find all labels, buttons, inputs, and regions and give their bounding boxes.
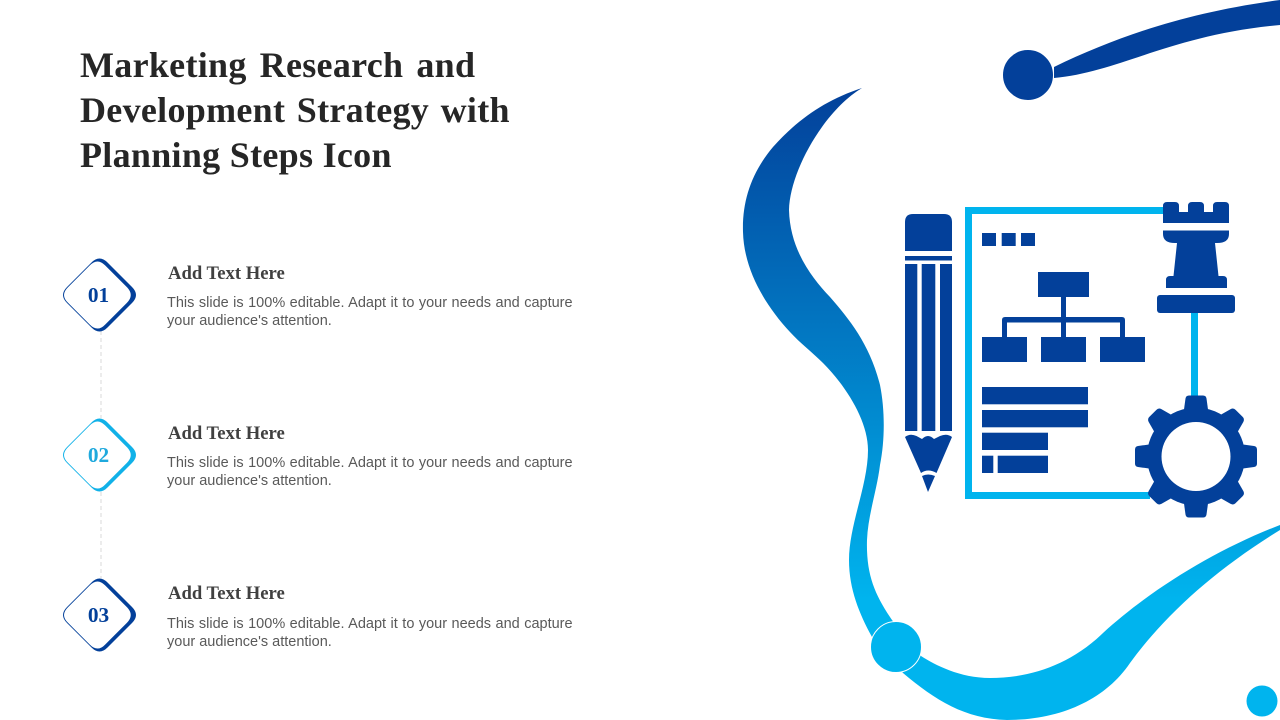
badge 02: 02 (88, 443, 109, 467)
badge 03 (63, 578, 136, 652)
step 1 (63, 258, 573, 332)
step 1 body: This slide is 100% editable. Adapt it to your needs and capture (167, 295, 573, 311)
badge 01: 01 (88, 283, 109, 307)
step 2 body: your audience's attention. (167, 473, 332, 489)
badge 01 (63, 258, 136, 332)
icon: pencil (905, 214, 952, 492)
icon: list bars (982, 387, 1088, 473)
step 2 heading: Add Text Here (168, 423, 285, 444)
icon: three small squares (982, 233, 1035, 246)
icon: document frame (968, 210, 1163, 496)
title: Planning Steps Icon (80, 135, 392, 175)
badge 02 (63, 418, 136, 492)
connector: dashed line 1 (100, 331, 102, 418)
badge 03: 03 (88, 603, 109, 627)
step 1 body (167, 295, 573, 329)
connector: dashed line 2 (100, 492, 102, 578)
step 1 body: your audience's attention. (167, 313, 332, 329)
step 2 (63, 418, 573, 492)
title: Development Strategy with (80, 90, 510, 130)
swoosh: top right curve (1054, 0, 1280, 78)
step 2 body: This slide is 100% editable. Adapt it to your needs and capture (167, 455, 573, 471)
icon: connector rook to gear (1191, 310, 1198, 400)
step 1 heading: Add Text Here (168, 263, 285, 284)
icon: org chart (982, 272, 1145, 362)
swoosh: main gradient curve (743, 88, 1280, 720)
step 3 body (167, 616, 573, 650)
step 3 (63, 578, 573, 652)
icon: gear (1135, 396, 1257, 518)
step 2 body (167, 455, 573, 489)
icon: chess rook (1157, 202, 1235, 313)
title: Marketing Research and (80, 45, 475, 85)
title (80, 45, 510, 175)
dot: bottom right (1246, 686, 1278, 716)
step 3 body: This slide is 100% editable. Adapt it to your needs and capture (167, 616, 573, 632)
step 3 heading: Add Text Here (168, 583, 285, 604)
dot: top dark (1002, 50, 1054, 100)
step 3 body: your audience's attention. (167, 634, 332, 650)
dot: mid light blue (870, 622, 922, 672)
